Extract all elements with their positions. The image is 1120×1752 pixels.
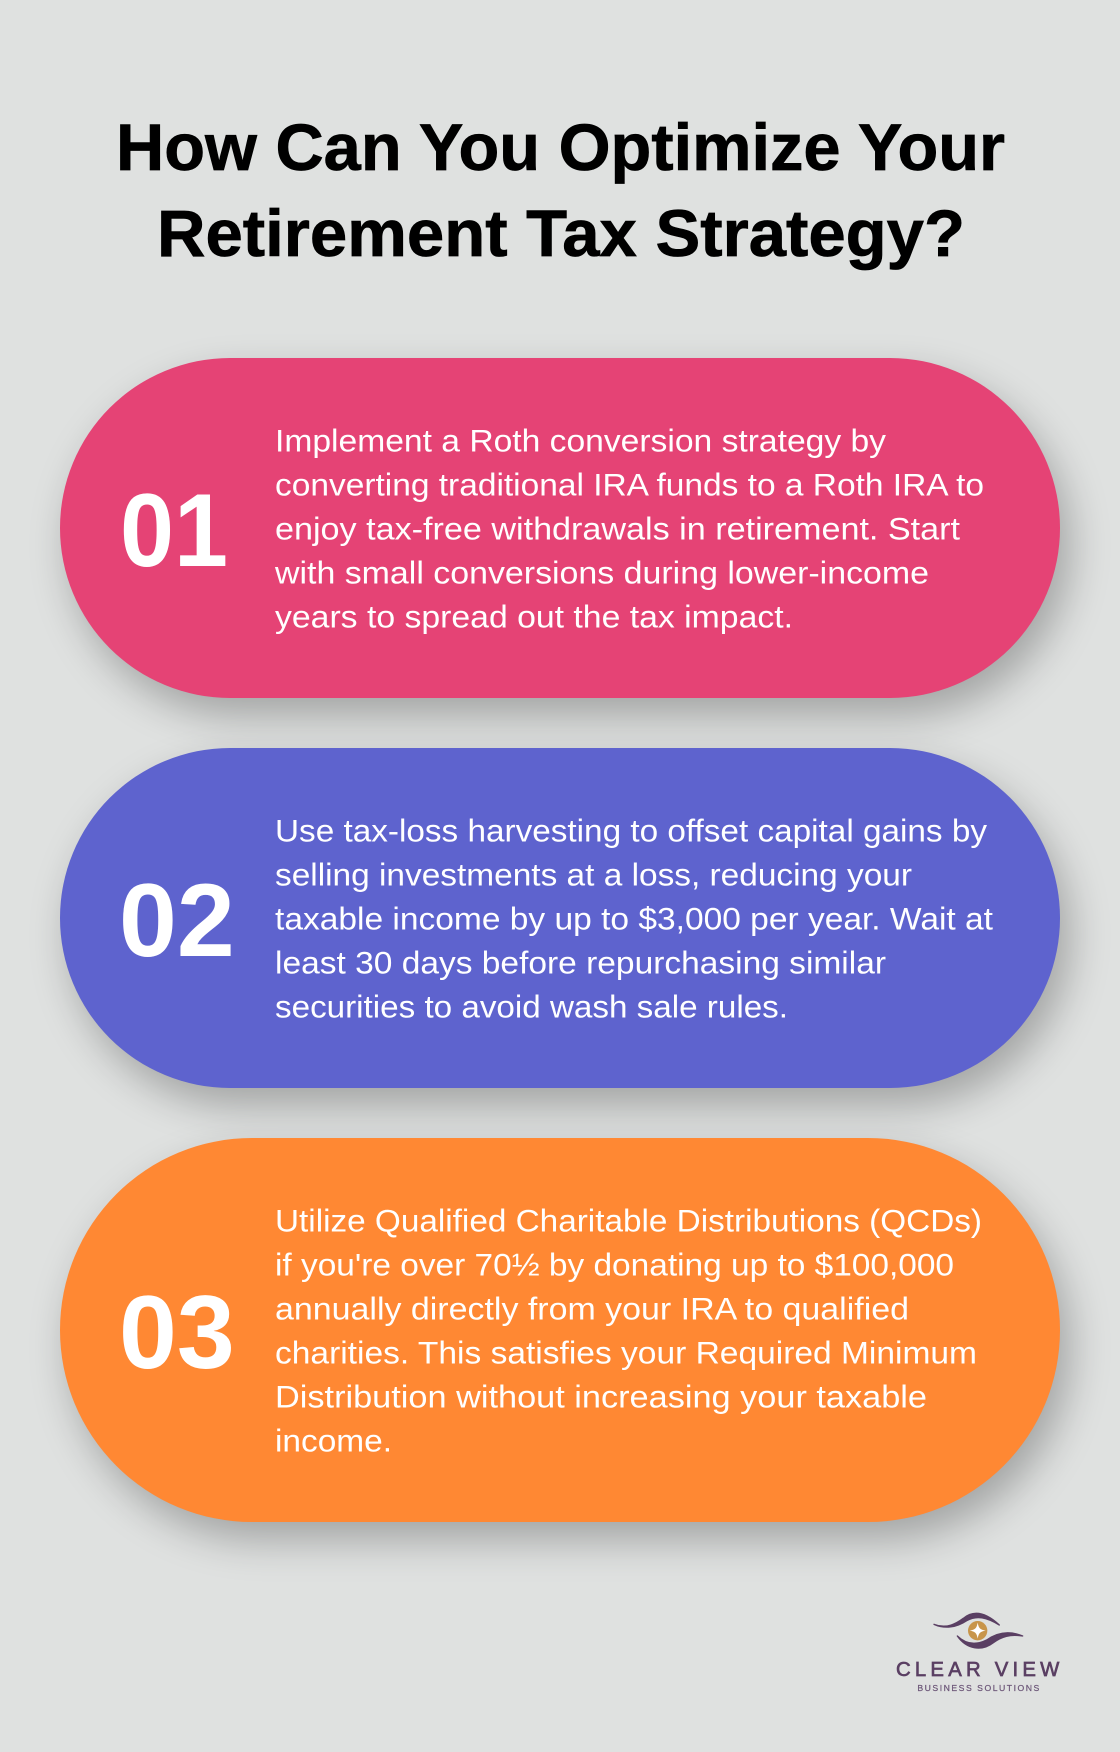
- text: qualified charitable distributions: income.: [275, 1423, 392, 1459]
- text: Roth conversion strategy: [274, 423, 984, 635]
- logo: Clear View Business Solutions: [896, 1612, 1060, 1693]
- number 03: 03: [119, 1275, 235, 1391]
- text: Roth conversion strategy: Implement a Roth conversion strategy by: [275, 423, 886, 459]
- text: Roth conversion strategy: enjoy tax-free withdrawals in retirement. Start: [275, 511, 960, 547]
- number 02: 02: [119, 863, 235, 979]
- text: qualified charitable distributions: charities. This satisfies your Required Minimum: [275, 1335, 977, 1371]
- text: tax-loss harvesting: [275, 813, 993, 1025]
- text: tax-loss harvesting: selling investments at a loss, reducing your: [275, 857, 912, 893]
- title: Retirement Tax Strategy?: [157, 196, 965, 270]
- title: [116, 110, 1005, 270]
- text: tax-loss harvesting: Use tax-loss harvesting to offset capital gains by: [275, 813, 987, 849]
- wordmark: CLEAR VIEW: [896, 1659, 1060, 1681]
- text: Roth conversion strategy: with small conversions during lower-income: [274, 555, 929, 591]
- text: qualified charitable distributions: Utilize Qualified Charitable Distributions (QCDs): [275, 1203, 982, 1239]
- text: Roth conversion strategy: converting traditional IRA funds to a Roth IRA to: [275, 467, 984, 503]
- text: tax-loss harvesting: least 30 days before repurchasing similar: [275, 945, 886, 981]
- text: tax-loss harvesting: securities to avoid wash sale rules.: [275, 989, 788, 1025]
- text: qualified charitable distributions: [275, 1203, 982, 1459]
- icon: eye with gold star: [934, 1613, 1023, 1648]
- text: Roth conversion strategy: years to spread out the tax impact.: [275, 599, 793, 635]
- text: qualified charitable distributions: Distribution without increasing your taxable: [275, 1379, 927, 1415]
- text: qualified charitable distributions: if you're over 70½ by donating up to $100,000: [275, 1247, 954, 1283]
- text: tax-loss harvesting: taxable income by up to $3,000 per year. Wait at: [275, 901, 993, 937]
- number 01: 01: [120, 473, 228, 589]
- panel: step 03: [60, 1138, 1060, 1522]
- panel: step 01: [60, 358, 1060, 698]
- tagline: BUSINESS SOLUTIONS: [917, 1683, 1040, 1693]
- title: How Can You Optimize Your: [116, 110, 1005, 184]
- text: qualified charitable distributions: annually directly from your IRA to qualified: [275, 1291, 909, 1327]
- panel: step 02: [60, 748, 1060, 1088]
